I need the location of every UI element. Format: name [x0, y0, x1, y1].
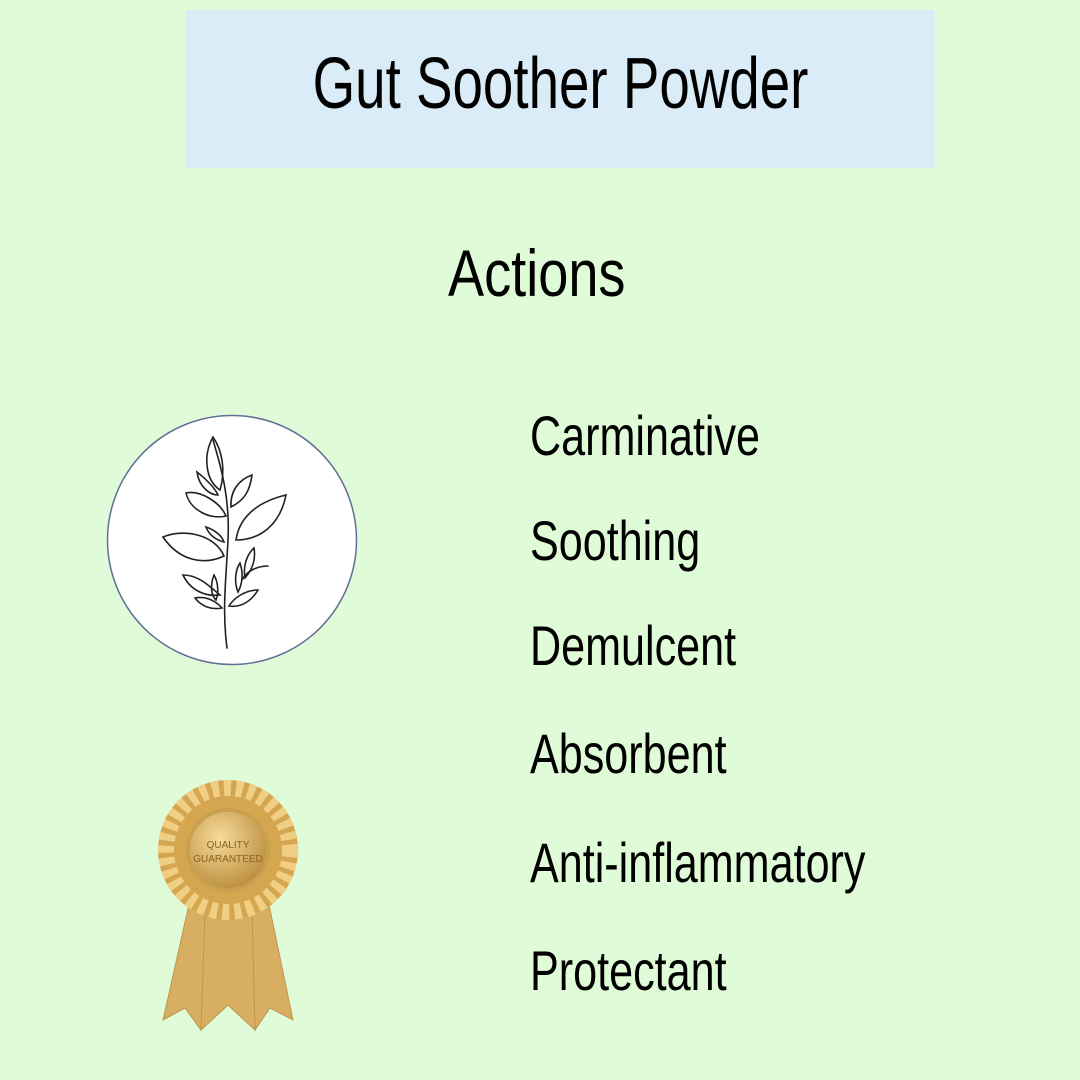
item: demulcent: Demulcent — [530, 614, 736, 677]
icon: quality rosette: QUALITY — [207, 840, 250, 851]
ribbon tails — [163, 900, 293, 1030]
item: carminative: Carminative — [530, 404, 760, 467]
title banner — [186, 10, 935, 168]
item: protectant: Protectant — [530, 939, 727, 1002]
heading: actions: Actions — [448, 236, 625, 310]
icon: plant circle — [106, 414, 358, 666]
title text: Gut Soother Powder — [313, 44, 808, 124]
item: soothing: Soothing — [530, 509, 700, 572]
item: absorbent: Absorbent — [530, 722, 727, 785]
icon: quality rosette — [158, 780, 298, 1032]
item: anti-inflammatory: Anti-inflammatory — [530, 831, 865, 894]
icon: quality rosette: GUARANTEED — [193, 854, 263, 865]
